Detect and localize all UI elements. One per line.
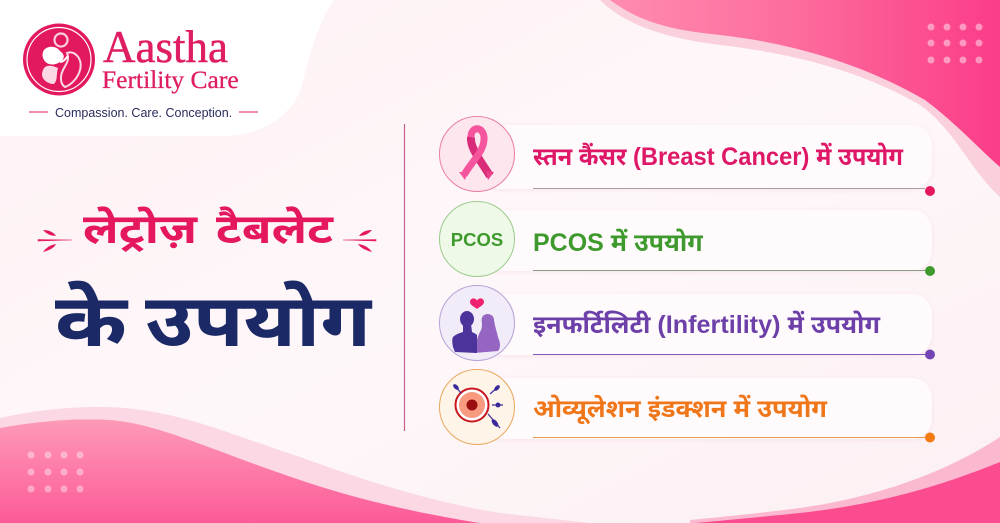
icon: egg and sperm [452,383,503,428]
title line 1: टैबलेट [216,205,334,252]
bottom-left wave [0,407,590,523]
card [480,294,932,355]
icon: couple [452,298,500,353]
icon circle [440,370,514,444]
underline [533,270,925,272]
card [480,125,932,189]
dot [925,350,935,360]
logo emblem [23,24,95,96]
card [480,210,932,271]
dot [925,432,935,442]
tagline: Compassion. Care. Conception. [55,106,232,120]
logo name: Aastha [103,22,228,72]
bottom-right wave [690,437,1000,523]
item: ovulation induction [440,370,935,444]
logo panel [0,0,334,136]
card [480,378,932,439]
flourish: left [38,230,72,252]
dots: top right [928,24,982,64]
title line 2 [55,279,373,362]
flourish: right [343,230,376,252]
underline [533,354,925,356]
top-right wave [600,0,1000,197]
underline [533,188,925,190]
icon: ribbon [459,129,494,180]
label: स्तन कैंसर (Breast Cancer) में उपयोग [533,142,904,171]
title line 1 [83,205,334,253]
item: PCOS [440,202,935,276]
title line 2: के [55,279,129,362]
item: infertility [440,286,935,360]
icon circle [440,116,514,192]
icon circle [440,202,514,276]
dot [925,186,935,196]
title line 1: लेट्रोज़ [83,205,198,253]
label: ओव्यूलेशन इंडक्शन में उपयोग [533,394,828,425]
divider [404,124,406,431]
label: PCOS में उपयोग [533,228,703,257]
title line 2: उपयोग [145,280,373,362]
dot [925,266,935,276]
label: इनफर्टिलिटी (Infertility) में उपयोग [533,310,881,339]
icon text: PCOS [451,229,503,250]
logo subtitle: Fertility Care [102,65,239,94]
icon circle [440,286,514,360]
underline [533,436,925,438]
item: breast cancer [440,116,935,196]
dots: bottom left [28,452,84,492]
